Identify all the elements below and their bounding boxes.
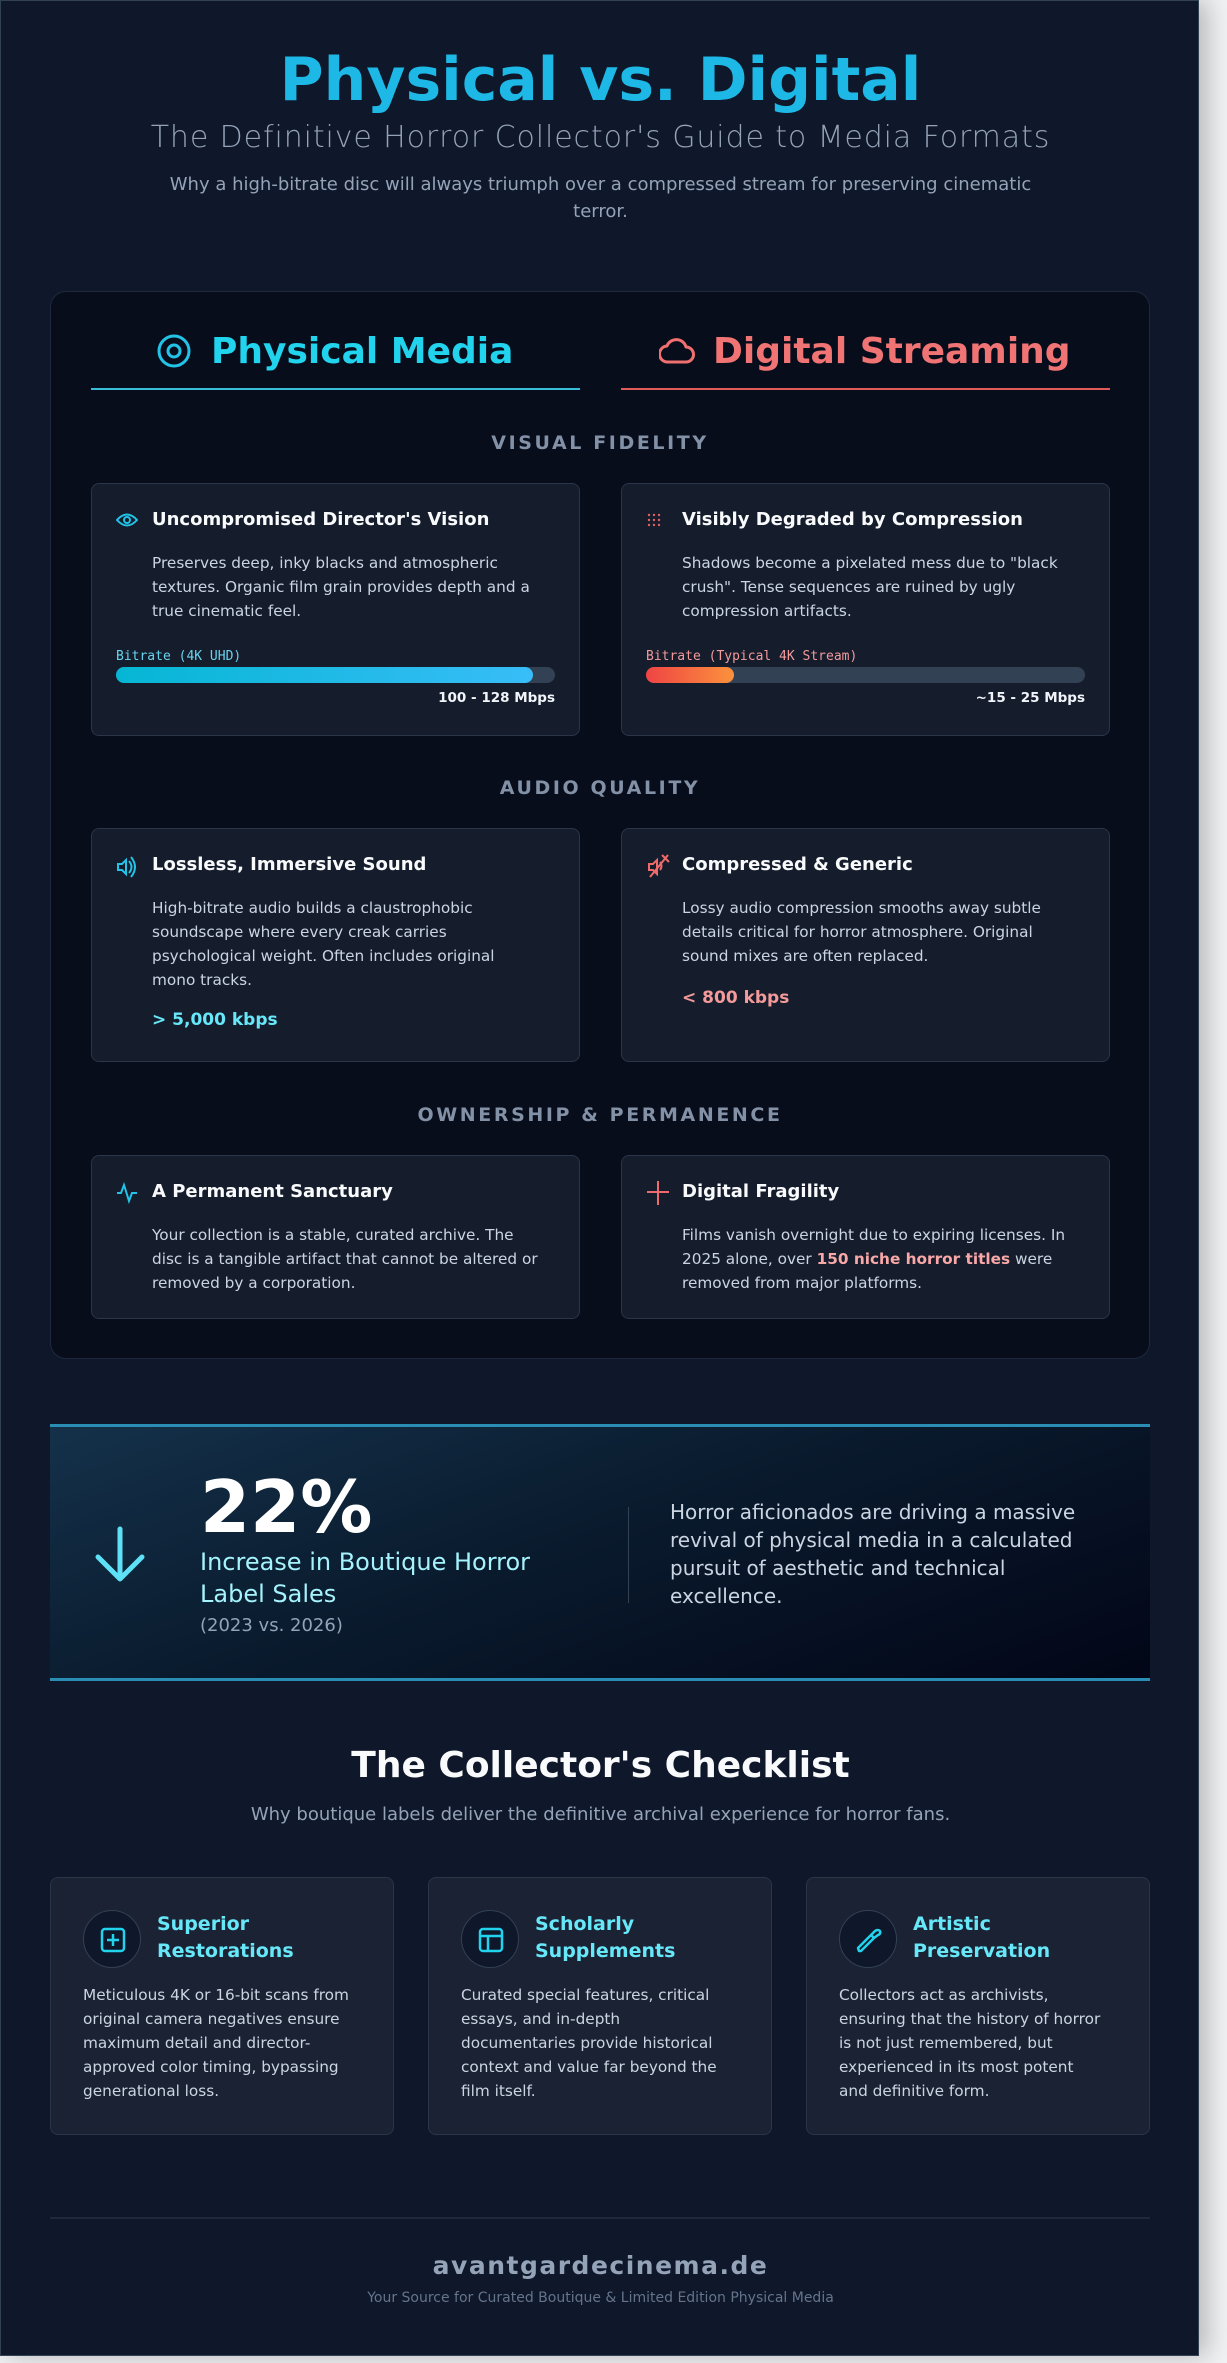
bar chart: physical bitrate <box>116 649 555 706</box>
icon: pulse <box>117 1182 137 1204</box>
card: degraded by compression: Shadows become a pixelated mess due to "black crush". Tense sequences are ruined by ugly compression artifacts. <box>682 554 1058 620</box>
stats banner <box>50 1424 1150 1681</box>
icon: down arrow <box>96 1526 144 1582</box>
intro text: Why a high-bitrate disc will always triumph over a compressed stream for preserving cinematic terror. <box>170 174 1031 222</box>
header: physical media <box>91 328 580 390</box>
card: artistic preservation: Artistic <box>913 1913 991 1935</box>
card: digital fragility <box>621 1155 1110 1319</box>
card: scholarly supplements <box>428 1877 772 2135</box>
stat: 22%: 22% <box>200 1465 372 1549</box>
icon: muted speaker <box>648 854 670 878</box>
icon: cloud <box>659 338 695 364</box>
card: permanent sanctuary: A Permanent Sanctuary <box>152 1181 393 1202</box>
subtitle: The Definitive Horror Collector's Guide to Media Formats <box>151 120 1050 155</box>
stat label: Increase in Boutique Horror Label Sales <box>200 1548 530 1608</box>
card: superior restorations: Restorations <box>157 1940 294 1962</box>
icon: speaker <box>117 856 136 878</box>
card: lossless sound: > 5,000 kbps <box>152 1010 278 1030</box>
card: digital fragility: Films vanish overnight due to expiring licenses. In 2025 alone, over 150 niche horror titles were removed from major platforms. <box>682 1226 1065 1292</box>
header: digital streaming <box>621 328 1110 390</box>
title: Physical vs. Digital <box>280 45 921 115</box>
bar chart: physical bitrate: Bitrate (4K UHD) <box>116 649 241 664</box>
card: lossless sound <box>91 828 580 1062</box>
stat description: Horror aficionados are driving a massive revival of physical media in a calculated pursuit of aesthetic and technical excellence. <box>670 1500 1075 1608</box>
section heading: visual fidelity: VISUAL FIDELITY <box>491 432 709 454</box>
card: compressed audio: Compressed & Generic <box>682 854 913 875</box>
stat note: (2023 vs. 2026) <box>200 1615 343 1636</box>
bar chart: streaming bitrate <box>646 649 1085 706</box>
card: compressed audio: Lossy audio compression smooths away subtle details critical for horror atmosphere. Original sound mixes are often replaced. <box>682 899 1041 965</box>
card: director's vision: Preserves deep, inky blacks and atmospheric textures. Organic film grain provides depth and a true cinematic feel. <box>152 554 530 620</box>
card: scholarly supplements: Scholarly <box>535 1913 634 1935</box>
card: director's vision <box>91 483 580 736</box>
card: lossless sound: Lossless, Immersive Sound <box>152 854 426 875</box>
checklist subtitle: Why boutique labels deliver the definitive archival experience for horror fans. <box>251 1804 950 1825</box>
footer brand: avantgardecinema.de <box>433 2251 768 2280</box>
icon: layout <box>461 1910 519 1968</box>
bar chart: streaming bitrate: ~15 - 25 Mbps <box>976 690 1085 706</box>
section heading: audio quality: AUDIO QUALITY <box>500 777 700 799</box>
card: compressed audio <box>621 828 1110 1062</box>
card: permanent sanctuary <box>91 1155 580 1319</box>
card: scholarly supplements: Curated special features, critical essays, and in-depth documentaries provide historical context and value far beyond the film itself. <box>461 1986 717 2100</box>
icon: eye <box>116 514 138 526</box>
icon: cross <box>647 1181 669 1205</box>
bar chart: physical bitrate: 100 - 128 Mbps <box>438 690 555 706</box>
card: digital fragility: Digital Fragility <box>682 1181 839 1202</box>
icon: pipette <box>839 1910 897 1968</box>
card: artistic preservation: Preservation <box>913 1940 1050 1962</box>
section heading: ownership: OWNERSHIP & PERMANENCE <box>417 1104 783 1126</box>
card: director's vision: Uncompromised Director's Vision <box>152 509 489 530</box>
footer tagline: Your Source for Curated Boutique & Limited Edition Physical Media <box>367 2290 834 2306</box>
card: degraded by compression: Visibly Degraded by Compression <box>682 509 1023 530</box>
card: degraded by compression <box>621 483 1110 736</box>
card: superior restorations: Superior <box>157 1913 249 1935</box>
checklist heading: The Collector's Checklist <box>351 1745 850 1786</box>
icon: pixel grid <box>648 514 660 526</box>
card: compressed audio: < 800 kbps <box>682 988 789 1008</box>
panel: comparison <box>50 291 1150 1359</box>
card: superior restorations <box>50 1877 394 2135</box>
icon: plus square <box>83 1910 141 1968</box>
card: lossless sound: High-bitrate audio builds a claustrophobic soundscape where every creak carries psychological weight. Often includes original mono tracks. <box>152 899 495 989</box>
card: scholarly supplements: Supplements <box>535 1940 675 1962</box>
bar chart: streaming bitrate: Bitrate (Typical 4K Stream) <box>646 649 857 664</box>
card: artistic preservation <box>806 1877 1150 2135</box>
card: superior restorations: Meticulous 4K or 16-bit scans from original camera negatives ensure maximum detail and director-approved color timing, bypassing generational loss. <box>83 1986 349 2100</box>
card: artistic preservation: Collectors act as archivists, ensuring that the history of horror is not just remembered, but experienced in its most potent and definitive form. <box>839 1986 1100 2100</box>
header: digital streaming: Digital Streaming <box>713 331 1071 372</box>
card: permanent sanctuary: Your collection is a stable, curated archive. The disc is a tangible artifact that cannot be altered or removed by a corporation. <box>152 1226 538 1292</box>
header: physical media: Physical Media <box>211 331 513 372</box>
icon: disc <box>158 334 190 368</box>
